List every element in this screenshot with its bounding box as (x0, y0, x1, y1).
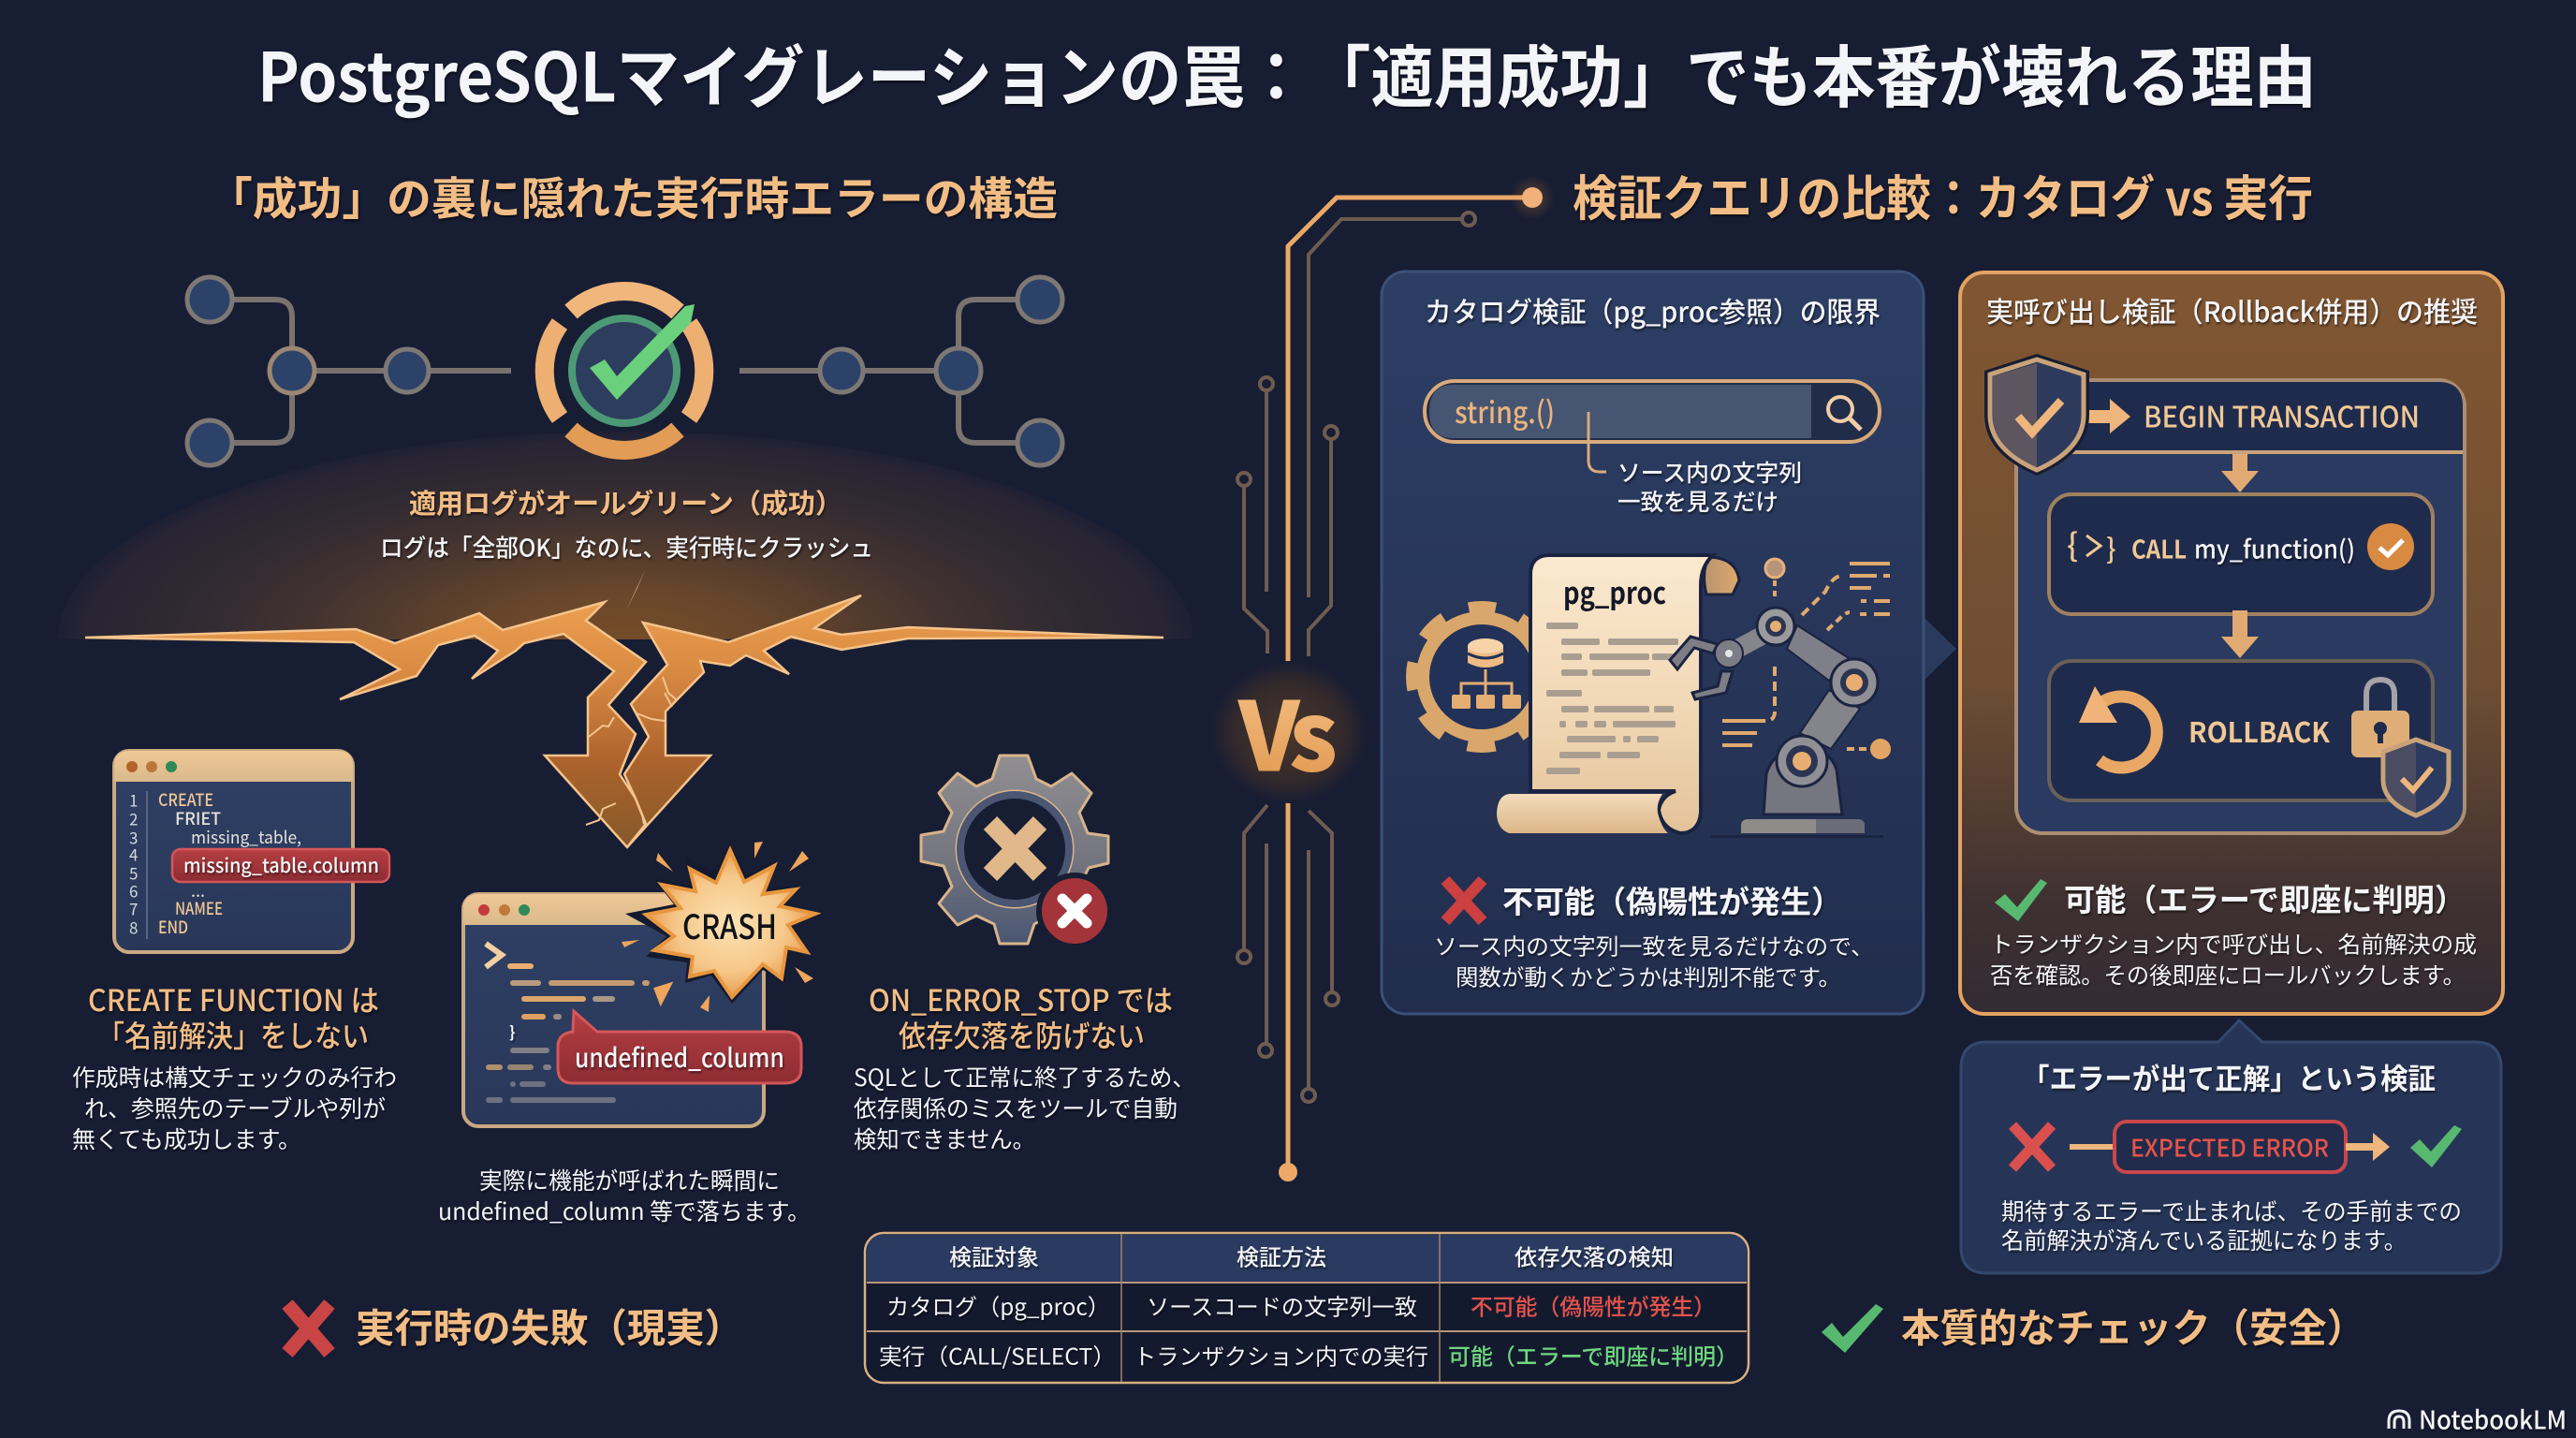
real call panel title: 実呼び出し検証（Rollback併用）の推奨 (1986, 289, 2478, 330)
call step box (2049, 494, 2433, 614)
crash explanation text (438, 1163, 811, 1227)
icon: broken gear (921, 756, 1110, 946)
crash starburst: CRASH (682, 901, 777, 949)
code window: create function: END (158, 915, 188, 939)
terminal window with crash: } (509, 1019, 515, 1043)
panel: catalog validation (1382, 271, 1924, 1014)
possible verdict: 可能（エラーで即座に判明） (2064, 875, 2466, 920)
crash starburst (622, 842, 819, 1012)
transaction flow box (2016, 380, 2465, 833)
table header row: 検証対象 (949, 1240, 1039, 1271)
table row: catalog: カタログ（pg_proc） (886, 1288, 1110, 1322)
main title: PostgreSQLマイグレーションの罠：「適用成功」でも本番が壊れる理由 (257, 22, 2317, 122)
crash explanation text: undefined_column 等で落ちます。 (438, 1194, 811, 1227)
code window: create function: 7 (129, 897, 138, 919)
create function body text (72, 1060, 397, 1155)
heading marker glow (1510, 175, 1555, 220)
call step box: { (2067, 521, 2078, 565)
left section heading: 「成功」の裏に隠れた実行時エラーの構造 (208, 162, 1058, 227)
search bar (1425, 381, 1880, 472)
table row: execution (879, 1339, 1738, 1371)
call step box: CALL (2131, 530, 2187, 565)
comparison table (865, 1233, 1749, 1383)
code window: create function: 5 (129, 861, 138, 884)
rollback step box (2049, 661, 2433, 800)
on error stop body text: 依存関係のミスをツールで自動 (854, 1091, 1178, 1124)
callout body text: 名前解決が済んでいる証拠になります。 (2001, 1223, 2407, 1256)
arrow: to call step (2221, 454, 2259, 492)
catalog explanation text: 関数が動くかどうかは判別不能です。 (1456, 959, 1841, 992)
icon: small shield (2383, 740, 2449, 815)
code window: create function: missing_table, (191, 825, 301, 849)
catalog panel title: カタログ検証（pg_proc参照）の限界 (1425, 289, 1881, 330)
callout body text (2001, 1194, 2462, 1256)
create function body text: れ、参照先のテーブルや列が (84, 1091, 386, 1124)
catalog explanation text: ソース内の文字列一致を見るだけなので、 (1434, 929, 1874, 961)
code window: create function: ... (191, 878, 205, 902)
table header row: 検証方法 (1237, 1240, 1326, 1271)
real call explanation text (1990, 927, 2477, 990)
essential check label: 本質的なチェック（安全） (1901, 1298, 2365, 1354)
impossible verdict: 不可能（偽陽性が発生） (1502, 877, 1842, 922)
icon: robot arm (1670, 559, 1891, 838)
lightning crack arrow (85, 568, 1164, 847)
missing column tag: missing_table.column (183, 851, 379, 879)
terminal window with crash (463, 842, 819, 1126)
node network: success log (187, 277, 1062, 465)
code window: create function: CREATE (158, 787, 213, 812)
arrow: to begin transaction (2086, 399, 2130, 433)
undefined column bubble: undefined_column (575, 1038, 784, 1076)
vs circuit lines (1237, 198, 1532, 1172)
table header row (949, 1240, 1674, 1271)
create function heading (88, 977, 379, 1056)
code window: create function: 3 (129, 826, 138, 848)
search bar note: ソース内の文字列 (1617, 455, 1802, 489)
crash explanation text: 実際に機能が呼ばれた瞬間に (479, 1163, 780, 1196)
scroll: pg_proc document: pg_proc (1563, 570, 1666, 613)
success log heading: 適用ログがオールグリーン（成功） (409, 482, 842, 521)
real call explanation text: 否を確認。その後即座にロールバックします。 (1990, 959, 2466, 990)
icon: success check badge (545, 291, 704, 450)
callout body text: 期待するエラーで止まれば、その手前までの (2001, 1194, 2462, 1227)
create function heading: 「名前解決」をしない (97, 1013, 369, 1056)
crash glow background (62, 433, 1189, 639)
lower line end dot (1279, 1163, 1297, 1181)
search bar: string.() (1455, 389, 1555, 433)
scroll: pg_proc document (1497, 555, 1739, 833)
code window: create function: 6 (129, 878, 138, 902)
search bar note (1617, 455, 1802, 518)
code window: create function: 4 (129, 843, 138, 865)
table row: catalog: 不可能（偽陽性が発生） (1471, 1288, 1716, 1322)
create function heading: CREATE FUNCTION は (88, 977, 379, 1020)
on error stop heading: ON_ERROR_STOP では (869, 977, 1173, 1020)
table row: execution: 可能（エラーで即座に判明） (1448, 1339, 1738, 1371)
connector triangle between panels (1925, 618, 1956, 680)
real call explanation text: トランザクション内で呼び出し、名前解決の成 (1990, 927, 2477, 961)
arrow: to rollback step (2221, 610, 2259, 658)
code window: create function: 8 (129, 916, 138, 938)
create function body text: 無くても成功します。 (72, 1122, 301, 1155)
callout: expected error check (1961, 1020, 2501, 1273)
create function body text: 作成時は構文チェックのみ行わ (72, 1060, 397, 1093)
call step box: } (2106, 526, 2116, 567)
icon: red cross, runtime failure (287, 1304, 329, 1353)
on error stop heading (869, 977, 1173, 1056)
vs badge (1210, 661, 1368, 803)
code window: create function (114, 751, 389, 952)
table header row: 依存欠落の検知 (1515, 1240, 1674, 1271)
icon: green check, essential check (1822, 1304, 1883, 1353)
on error stop heading: 依存欠落を防げない (899, 1013, 1145, 1056)
code window: create function: NAMEE (175, 896, 223, 920)
icon: database gear (1412, 607, 1552, 747)
heading marker dot (1522, 187, 1543, 208)
table row: catalog: ソースコードの文字列一致 (1147, 1288, 1417, 1322)
success log subtext: ログは「全部OK」なのに、実行時にクラッシュ (380, 530, 873, 564)
call step box: my_function() (2194, 530, 2355, 565)
on error stop body text: SQLとして正常に終了するため、 (854, 1060, 1195, 1093)
on error stop body text: 検知できません。 (854, 1122, 1035, 1155)
catalog explanation text (1434, 929, 1874, 992)
code window: create function: 2 (129, 807, 138, 829)
callout heading: 「エラーが出て正解」という検証 (2022, 1056, 2436, 1097)
code window: create function: FRIET (175, 806, 221, 830)
undefined column bubble (558, 1011, 801, 1083)
on error stop body text (854, 1060, 1195, 1155)
runtime failure label: 実行時の失敗（現実） (356, 1298, 743, 1354)
notebooklm logo: NotebookLM (2419, 1401, 2567, 1436)
rollback step box: ROLLBACK (2188, 710, 2330, 751)
begin transaction label: BEGIN TRANSACTION (2144, 393, 2420, 436)
right section heading: 検証クエリの比較：カタログ vs 実行 (1573, 159, 2313, 230)
expected error flow: EXPECTED ERROR (2130, 1129, 2329, 1165)
vs badge: Vs (1237, 661, 1338, 800)
panel: real call validation (1960, 272, 2503, 1014)
table row: execution: トランザクション内での実行 (1134, 1339, 1428, 1371)
code window: create function: 1 (129, 788, 138, 811)
table row: execution: 実行（CALL/SELECT） (879, 1339, 1116, 1371)
table row: catalog (886, 1288, 1716, 1322)
expected error flow (2012, 1122, 2462, 1172)
search bar note: 一致を見るだけ (1617, 484, 1778, 518)
icon: large shield (1984, 354, 2089, 476)
